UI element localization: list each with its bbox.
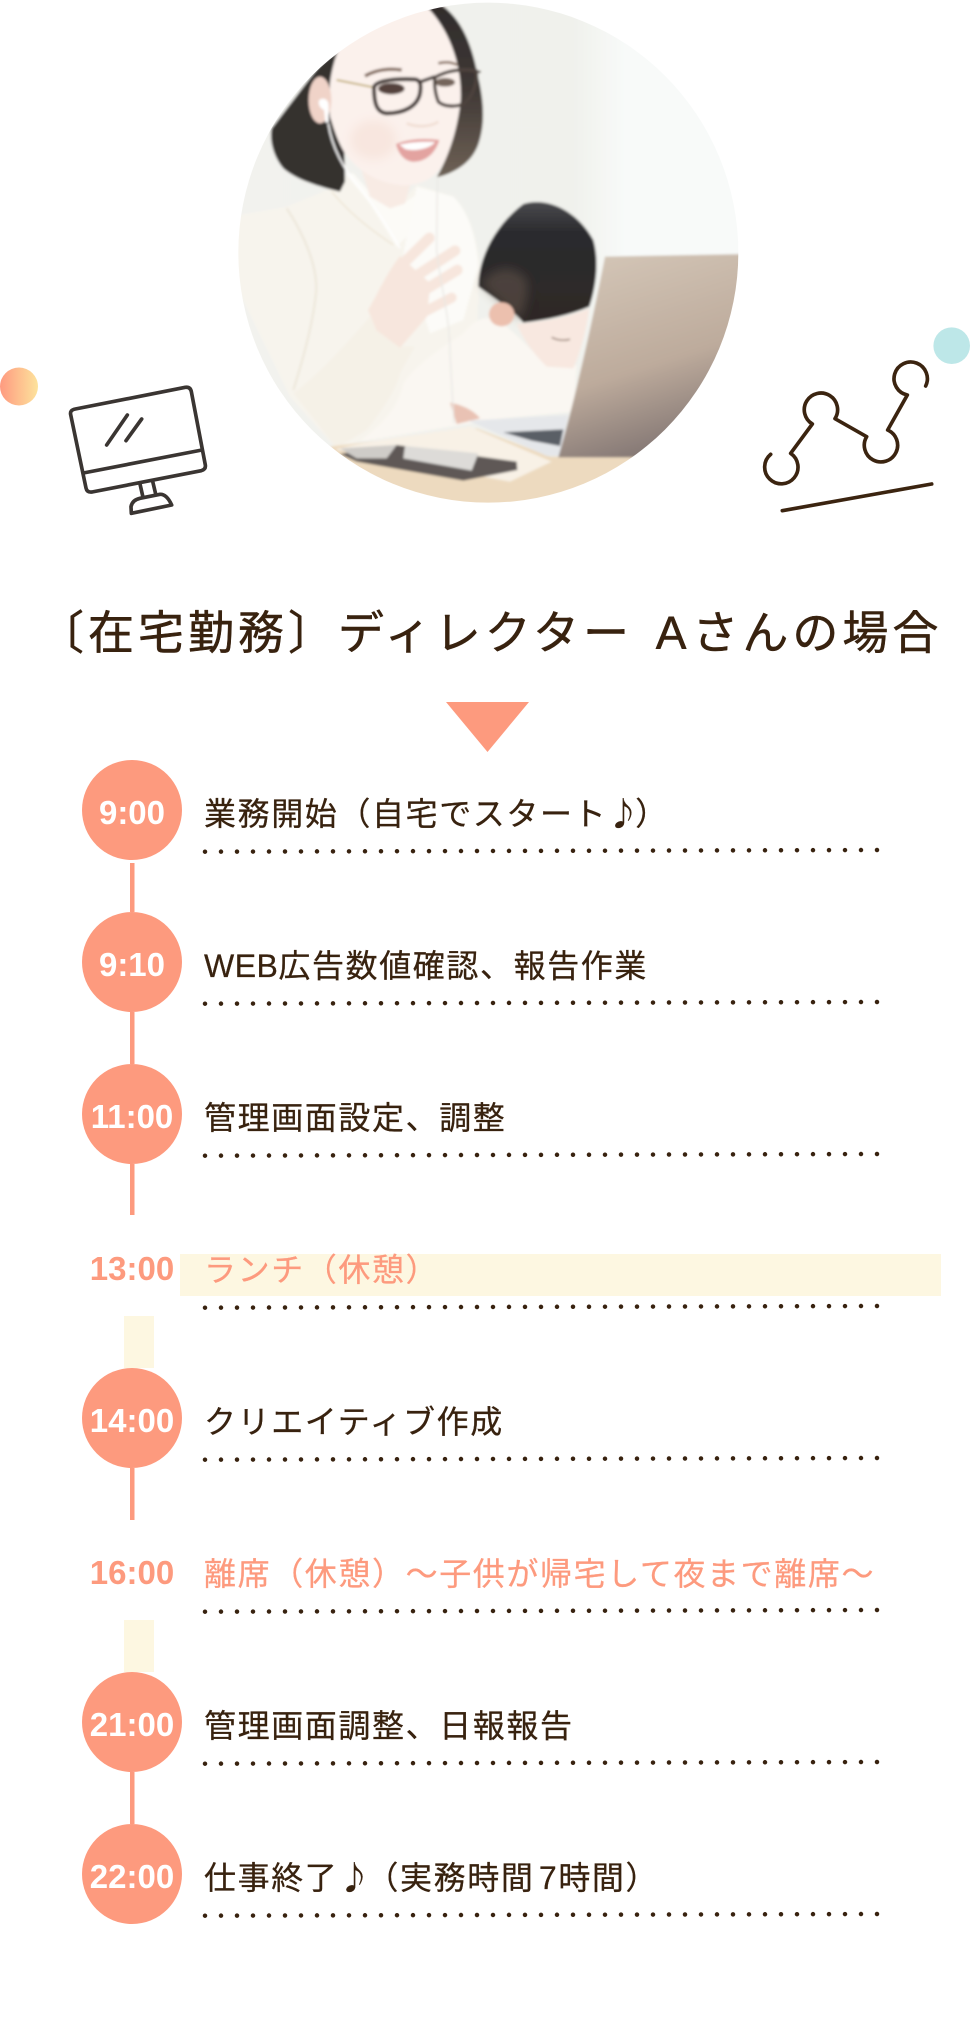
icon: monitor [71,387,205,513]
tablet [340,445,517,481]
eyebrows [365,69,402,76]
timeline row: 9:10 [82,912,877,1012]
ear [309,77,331,123]
raised hand [368,238,457,347]
timeline row: 16:00 away [90,1554,877,1612]
timeline row: 21:00: 21:00 [90,1706,174,1743]
earbud [319,99,329,123]
baby eye [552,337,570,340]
photo: mother with baby at laptop [230,0,750,520]
heading: 〔在宅勤務〕ディレクター Aさんの場合 [38,607,942,659]
timeline row: 14:00: 14:00 [90,1402,174,1439]
mother right hair [427,0,483,177]
nose shadow [407,122,438,126]
baby hair [478,202,597,323]
timeline row: 21:00: 管理画面調整、日報報告 [204,1708,574,1744]
mother sweater [230,177,480,448]
laptop lid [558,254,750,457]
timeline row: 22:00: 22:00 [90,1858,174,1895]
baby ear [489,302,514,326]
hand under baby [450,403,480,424]
orange dot [0,368,38,406]
mother sleeve [293,317,415,448]
earphone wire [325,122,348,172]
timeline row: 9:00 [82,760,877,860]
neck [365,176,407,208]
table [330,428,634,503]
timeline row: 9:00: 9:00 [99,794,165,831]
icon: line chart [765,362,932,511]
timeline row: 14:00 [82,1368,877,1468]
sweater shadow [287,208,316,390]
timeline row: 13:00 lunch [90,1250,941,1308]
mouth [396,139,439,162]
timeline row: 16:00 away: 離席（休憩）～子供が帰宅して夜まで離席～ [204,1556,875,1592]
paper on table [335,427,552,482]
timeline row: 13:00 lunch: ランチ（休憩） [204,1252,439,1288]
timeline row: 22:00: 仕事終了♪（実務時間 7時間） [204,1853,659,1899]
timeline row: 9:00: 業務開始（自宅でスタート♪） [204,789,669,835]
timeline row: 11:00 [82,1064,877,1164]
arrow: down triangle [446,702,529,752]
face [330,0,461,185]
laptop base [472,416,567,455]
teal dot [933,327,970,364]
timeline row: 22:00 [82,1824,877,1924]
timeline row: 11:00: 管理画面設定、調整 [204,1100,506,1136]
cheek tint [353,122,394,158]
timeline row: 16:00 away: 16:00 [90,1554,174,1591]
baby body [382,320,575,436]
glasses [337,69,481,113]
timeline row: 9:10: 9:10 [99,946,165,983]
timeline row: 14:00: クリエイティブ作成 [204,1404,504,1440]
timeline row: 9:10: WEB広告数値確認、報告作業 [204,948,648,984]
mother back hair [270,52,347,193]
eyes [378,83,405,94]
timeline row: 21:00 [82,1672,877,1772]
timeline row: 11:00: 11:00 [91,1098,173,1135]
timeline row: 13:00 lunch: 13:00 [90,1250,174,1287]
sweater collar [352,176,412,242]
baby face [517,308,589,368]
connector lines and cream breaks [124,863,154,1824]
mother chest [403,187,478,333]
